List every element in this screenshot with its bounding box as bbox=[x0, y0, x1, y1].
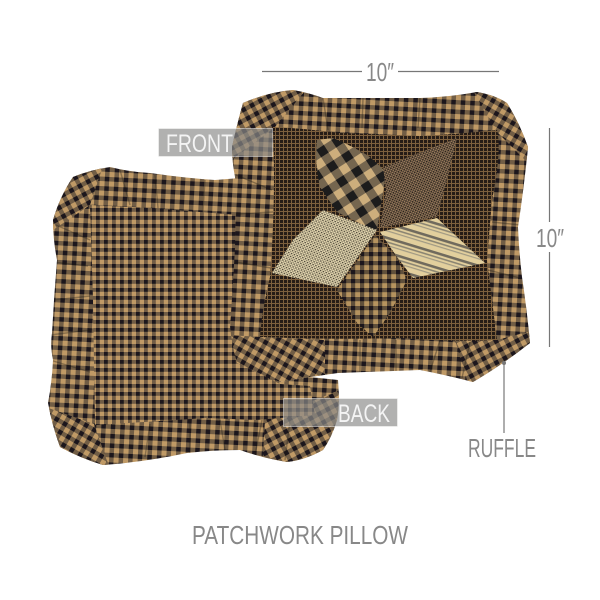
title: PATCHWORK PILLOW bbox=[192, 520, 408, 550]
callout: ruffle: RUFFLE bbox=[468, 433, 536, 463]
label: BACK bbox=[284, 398, 398, 428]
star: gingham point bbox=[337, 235, 407, 337]
front pillow bbox=[225, 85, 535, 390]
back pillow bbox=[40, 160, 345, 475]
star: tiny check point bbox=[380, 138, 457, 228]
label: FRONT: FRONT bbox=[166, 130, 233, 158]
back ruffle bbox=[40, 160, 345, 470]
front ruffle corners bbox=[225, 85, 535, 390]
infographic: patchwork pillow bbox=[48, 62, 564, 544]
star: buffalo check point bbox=[316, 138, 386, 230]
star: light check point bbox=[272, 210, 377, 287]
label: BACK: BACK bbox=[338, 400, 390, 428]
star: ticking stripe point bbox=[380, 218, 485, 278]
back panel bbox=[90, 205, 315, 425]
height dimension: 10 inches: 10″ bbox=[536, 223, 564, 253]
callout: ruffle bbox=[468, 361, 536, 463]
width dimension: 10 inches: 10″ bbox=[366, 57, 394, 87]
back ruffle corners bbox=[49, 168, 339, 465]
front patchwork panel bbox=[260, 127, 499, 341]
front ruffle bbox=[225, 85, 535, 390]
